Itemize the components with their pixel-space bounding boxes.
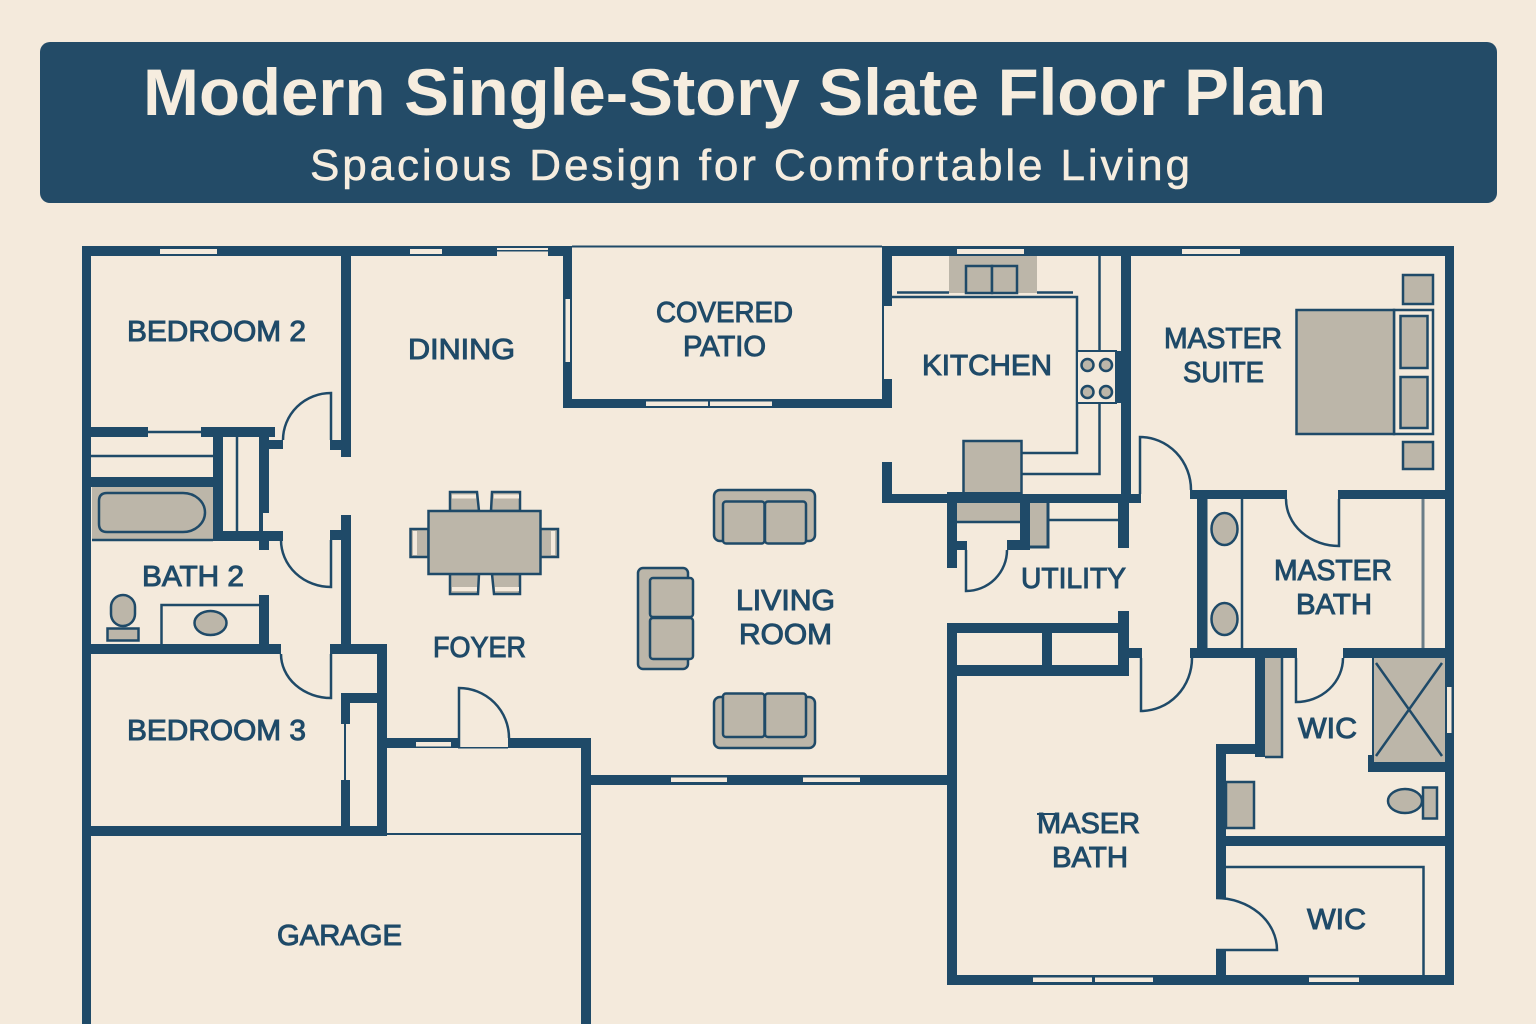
wic shelf [1265,658,1282,757]
title: Modern Single-Story Slate Floor Plan [143,55,1326,129]
label: master suite: MASTER [1164,323,1282,355]
dining table with six chairs [410,492,558,594]
subtitle: Spacious Design for Comfortable Living [310,141,1190,190]
bath 2 vanity [162,605,259,644]
linen closet lines [91,432,237,531]
label: living room: ROOM [739,619,832,651]
label: maser bath: MASER [1037,808,1140,840]
label: master bath: MASTER [1274,555,1392,587]
bed [1296,275,1433,469]
door: master suite [1140,437,1191,494]
bath 2 toilet [108,595,138,640]
label: covered patio: PATIO [683,331,766,363]
label: maser bath: BATH [1052,842,1128,874]
label: dining: DINING [408,334,515,366]
door: bath 2 [281,540,331,587]
door: lower closet [1216,898,1277,950]
label: lower wic: WIC [1307,904,1366,936]
windows [160,249,1452,982]
label: garage: GARAGE [277,920,402,952]
kitchen sink counter [897,256,1073,293]
master wing walls [1190,490,1454,975]
sofa: left [638,568,693,669]
door: hall [1141,658,1192,711]
kitchen counter lines [892,256,1100,474]
stove [1077,351,1116,403]
door: bedroom 3 [281,654,331,698]
label: covered patio: COVERED [656,297,793,329]
master toilet [1388,788,1437,818]
label: utility: UTILITY [1021,563,1126,595]
label: bedroom 3: BEDROOM 3 [127,715,306,747]
grey cabinet [1226,782,1254,828]
walls [82,246,1454,1024]
bathtub [92,487,213,540]
label: living room: LIVING [736,585,835,617]
sofa: bottom [714,694,815,748]
kitchen and utility walls [882,256,1142,985]
door: walk-in closet [1296,658,1343,702]
label: bedroom 2: BEDROOM 2 [127,316,306,348]
door: utility [966,550,1007,591]
label: foyer: FOYER [433,632,526,664]
door: master bath [1286,499,1339,546]
room labels [127,297,1392,952]
kitchen island [964,441,1022,495]
label: master suite: SUITE [1183,357,1264,389]
fixtures: kitchen, bath and closet grey fills [91,256,1445,975]
label: master bath: BATH [1296,589,1372,621]
door: entry [459,688,509,748]
sofa: top [714,490,815,544]
master bath sinks [1212,499,1423,648]
door: bedroom 2 [283,393,331,440]
title banner [40,42,1497,203]
covered patio walls [563,246,892,408]
door swings [281,393,1343,950]
shower [1374,658,1445,762]
lower closet rail [1226,867,1424,975]
left wing walls [82,256,947,836]
label: kitchen: KITCHEN [922,350,1052,382]
label: upper wic: WIC [1298,713,1357,745]
utility appliances [957,503,1119,547]
outer walls [82,246,1454,1024]
label: bath 2: BATH 2 [142,561,244,593]
